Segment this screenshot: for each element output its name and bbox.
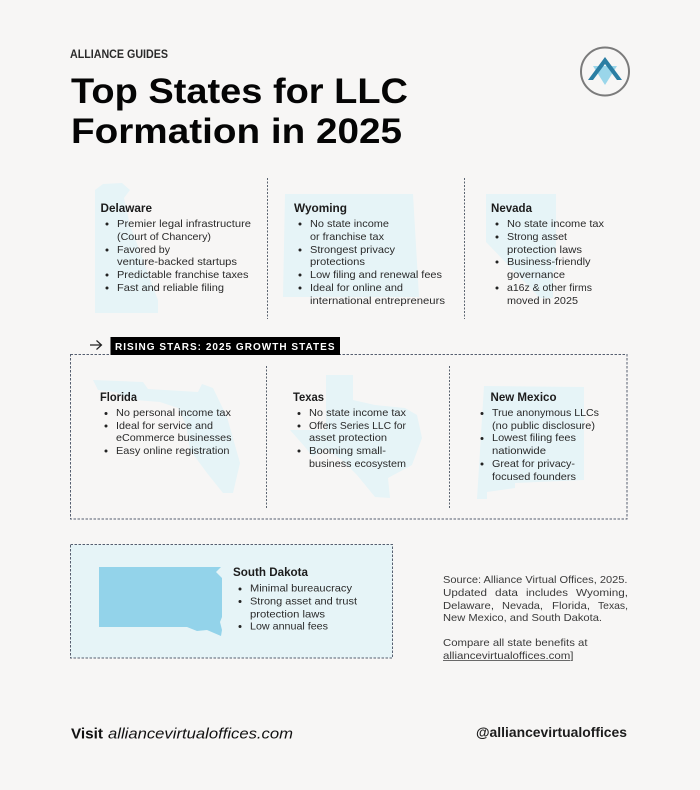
list: Nevada benefits: Business-friendly	[507, 257, 591, 268]
list: Wyoming benefits: Strongest privacy	[310, 245, 396, 256]
source note: Source: Alliance Virtual Offices, 2025.	[443, 575, 628, 586]
source note: Compare all state benefits at	[443, 638, 588, 649]
source note: Nevada,	[502, 601, 543, 612]
state shape: Wyoming	[283, 194, 419, 297]
heading: Florida: Florida	[100, 392, 138, 404]
source note: includes	[526, 588, 568, 599]
panel: Florida	[93, 380, 240, 493]
list: New Mexico benefits: Lowest filing fees	[492, 433, 576, 444]
footer: visit link: Visit	[71, 726, 103, 742]
source note: Delaware,	[443, 601, 494, 612]
list: Texas benefits: asset protection	[309, 433, 387, 444]
panel: New Mexico	[477, 386, 599, 499]
state shape: New Mexico	[477, 386, 584, 499]
list: Texas benefits: No state income tax	[309, 408, 406, 419]
list: Nevada benefits: Strong asset	[507, 232, 567, 243]
list: South Dakota benefits: Minimal bureaucracy	[250, 584, 353, 594]
heading: Delaware: Delaware	[100, 203, 152, 215]
heading: Nevada: Nevada	[491, 203, 533, 215]
panel: Rising Stars box	[70, 337, 627, 519]
list: New Mexico benefits: Great for privacy-	[492, 459, 575, 470]
list: Delaware benefits: venture-backed startups	[117, 257, 237, 268]
list: Delaware benefits: Favored by	[117, 245, 171, 256]
panel: Delaware	[95, 183, 251, 313]
arrow	[90, 340, 102, 350]
list: Nevada benefits: moved in 2025	[507, 296, 578, 307]
list: Florida benefits: No personal income tax	[116, 408, 231, 419]
list: Texas benefits	[298, 408, 407, 470]
source note: New Mexico, and South Dakota.	[443, 613, 602, 624]
list: Wyoming benefits: No state income	[310, 219, 389, 230]
list: New Mexico benefits: focused founders	[492, 472, 576, 483]
list: Delaware benefits	[106, 219, 251, 294]
icon: Alliance logo	[581, 48, 629, 96]
list: Texas benefits: business ecosystem	[309, 459, 406, 470]
source note	[443, 575, 628, 662]
list: Florida benefits: eCommerce businesses	[116, 433, 232, 444]
list: South Dakota benefits: Low annual fees	[250, 622, 328, 632]
heading: New Mexico: New Mexico	[490, 392, 556, 404]
state shape: Florida	[93, 380, 240, 493]
state shape: Texas	[290, 375, 422, 498]
list: Delaware benefits: Fast and reliable filing	[117, 283, 224, 294]
heading: South Dakota: South Dakota	[233, 567, 309, 579]
title: Top States for LLC	[71, 72, 408, 111]
source note: Wyoming,	[576, 588, 628, 599]
list: South Dakota benefits	[238, 584, 357, 632]
list: Texas benefits: Booming small-	[309, 446, 386, 457]
heading: Wyoming: Wyoming	[294, 203, 347, 215]
list: Delaware benefits: Premier legal infrastructure	[117, 219, 251, 230]
list: Wyoming benefits: protections	[310, 257, 365, 268]
list: Wyoming benefits	[298, 219, 445, 307]
list: Wyoming benefits: international entrepreneurs	[310, 296, 445, 307]
list: Wyoming benefits: or franchise tax	[310, 232, 384, 243]
list: Florida benefits: Easy online registration	[116, 446, 230, 457]
footer: social handle: @alliancevirtualoffices	[476, 725, 627, 740]
source note: Florida,	[552, 601, 590, 612]
heading: Texas: Texas	[293, 392, 324, 404]
list: Wyoming benefits: Ideal for online and	[310, 283, 403, 294]
panel: Texas	[290, 375, 422, 498]
list: Wyoming benefits: Low filing and renewal fees	[310, 270, 442, 281]
list: Nevada benefits: governance	[507, 270, 565, 281]
list: Nevada benefits: No state income tax	[507, 219, 604, 230]
banner: Rising Stars heading	[110, 337, 340, 355]
list: South Dakota benefits: protection laws	[250, 610, 325, 620]
title	[71, 72, 408, 151]
list: New Mexico benefits	[480, 408, 599, 483]
state shape: South Dakota	[99, 567, 222, 636]
list: New Mexico benefits: (no public disclosure)	[492, 421, 595, 432]
list: Texas benefits: Offers Series LLC for	[309, 421, 407, 432]
source note: data	[495, 588, 518, 599]
panel: South Dakota	[70, 544, 392, 658]
list: New Mexico benefits: nationwide	[492, 446, 546, 457]
list: South Dakota benefits: Strong asset and trust	[250, 596, 357, 608]
list: Nevada benefits: protection laws	[507, 245, 582, 256]
state shape: Nevada	[486, 194, 556, 298]
panel: Wyoming	[283, 194, 445, 307]
list: Nevada benefits	[496, 219, 604, 307]
state shape: Delaware	[95, 183, 158, 313]
source note: Updated	[443, 588, 487, 599]
list: Delaware benefits: Predictable franchise taxes	[117, 270, 248, 281]
panel: Nevada	[486, 194, 604, 307]
list: New Mexico benefits: True anonymous LLCs	[492, 408, 599, 419]
banner: Rising Stars heading: RISING STARS: 2025 GROWTH STATES	[115, 342, 335, 353]
title: Formation in 2025	[71, 112, 402, 151]
list: Nevada benefits: a16z & other firms	[507, 283, 592, 294]
list: Delaware benefits: (Court of Chancery)	[117, 232, 211, 243]
eyebrow: Alliance Guides: ALLIANCE GUIDES	[70, 47, 168, 61]
source note: Texas,	[598, 601, 628, 612]
list: Florida benefits	[104, 408, 232, 457]
source note: alliancevirtualoffices.com]	[443, 651, 574, 662]
list: Florida benefits: Ideal for service and	[116, 421, 213, 432]
footer: visit link: alliancevirtualoffices.com	[108, 726, 293, 742]
